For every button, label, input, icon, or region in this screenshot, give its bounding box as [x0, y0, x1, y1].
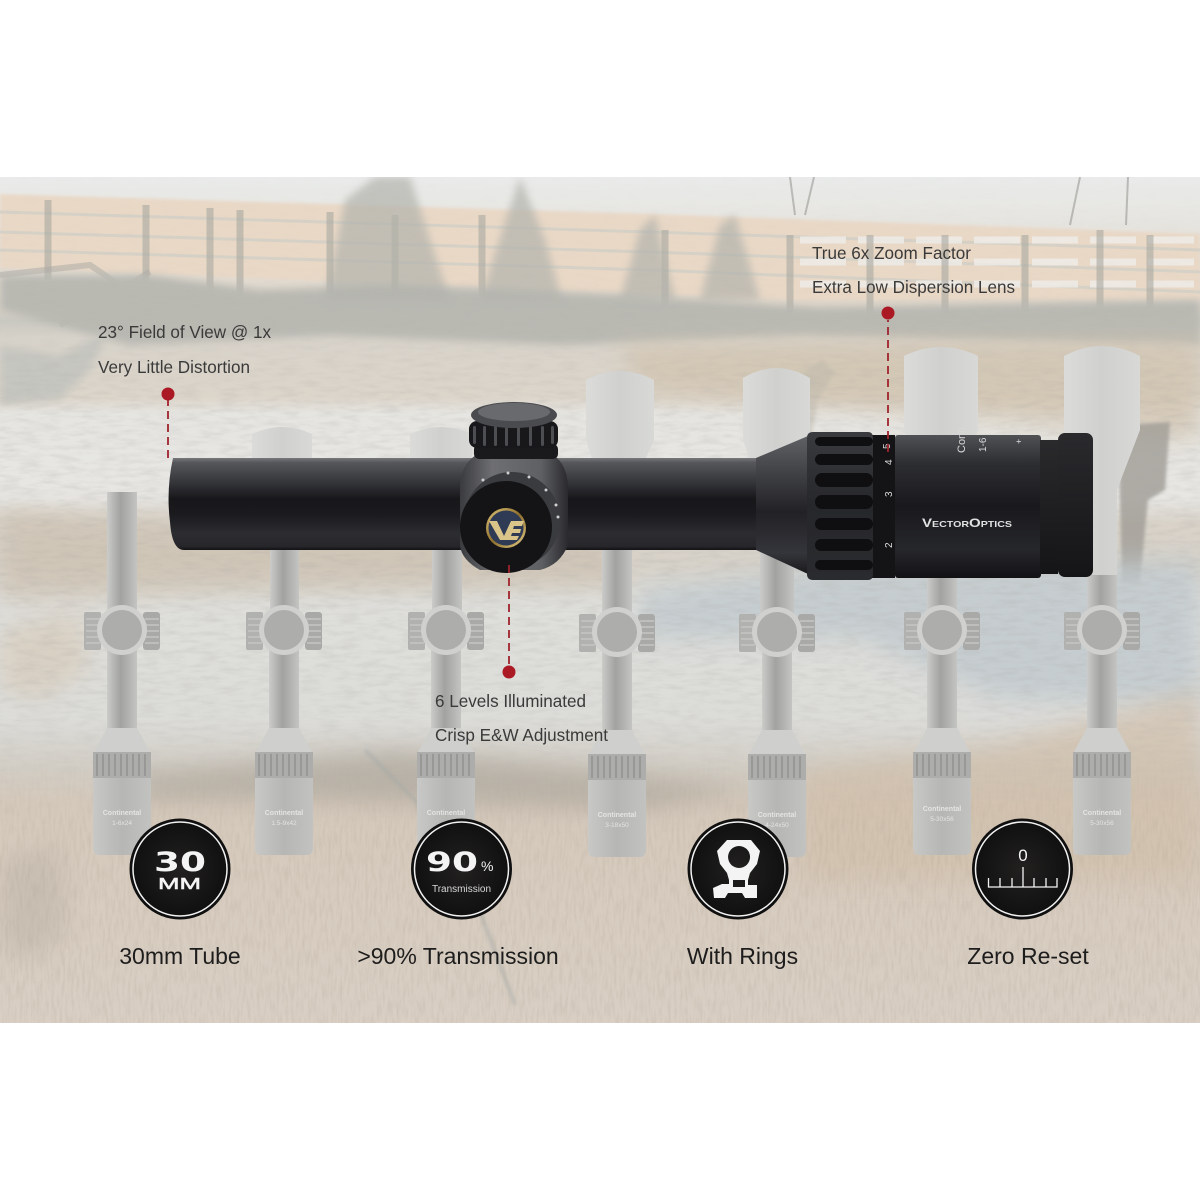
dry grass on right	[620, 340, 1200, 440]
icon: 30 mm badge: MM	[158, 876, 201, 893]
main rifle scope	[169, 402, 1093, 580]
lower dark shrubs	[130, 750, 760, 810]
feature: with rings: With Rings	[687, 943, 798, 969]
icon: 90 percent badge: 90	[426, 847, 478, 878]
model text on eyepiece	[956, 427, 1024, 453]
top turret	[469, 402, 558, 459]
model text on eyepiece: 1-6	[978, 437, 989, 452]
dark bush left	[2, 854, 66, 954]
eyepiece body	[895, 435, 1041, 578]
pin and leader	[502, 565, 516, 678]
ghost scope 6: 5-30x56	[930, 816, 954, 823]
feature: transmission	[357, 818, 559, 969]
magnification numbers: 5	[882, 443, 893, 449]
left grass patch	[0, 610, 90, 700]
callout: illumination: 6 Levels Illuminated	[435, 691, 586, 711]
ghost scope 6	[904, 347, 980, 855]
magnification numbers: 3	[884, 491, 895, 497]
ghost scope 1: Continental	[103, 810, 141, 817]
ghost scope 2	[246, 427, 322, 855]
ghost scope 2: 1.5-9x42	[271, 820, 297, 827]
ghost scope 7: Continental	[1083, 810, 1121, 817]
icon: scope ring	[688, 818, 788, 920]
callout: field of view	[98, 322, 271, 458]
magnification numbers: 2	[884, 542, 895, 548]
icon: zero scale	[972, 818, 1073, 920]
eyepiece flare	[756, 436, 808, 574]
ghost scope 5: Continental	[758, 812, 796, 819]
icon: 90 percent badge: Transmission	[432, 884, 491, 895]
ghost scope 5: 4-24x50	[765, 822, 789, 829]
callout: illumination	[435, 565, 608, 745]
callout: zoom factor: True 6x Zoom Factor	[812, 243, 971, 263]
icon: 90 percent badge: %	[481, 858, 493, 874]
water stream	[640, 560, 1200, 705]
feature: 30mm tube	[119, 818, 241, 969]
ghost scope 4: 3-18x50	[605, 822, 629, 829]
pin and leader	[162, 388, 174, 458]
callout: field of view: Very Little Distortion	[98, 357, 250, 377]
pin and leader	[882, 306, 894, 452]
stream channel	[365, 750, 515, 1005]
feature: 30mm tube: 30mm Tube	[119, 943, 241, 969]
icon: zero scale: 0	[1018, 846, 1028, 865]
fence	[0, 194, 1200, 325]
ghost scope 3: Continental	[427, 810, 465, 817]
right brown bank	[800, 690, 1200, 880]
callout: illumination: Crisp E&W Adjustment	[435, 725, 608, 745]
deer silhouette	[804, 363, 832, 432]
ghost scope 5	[739, 368, 815, 857]
feature: zero re-set: Zero Re-set	[967, 943, 1089, 969]
ghost scope 7: 5-30x56	[1090, 820, 1114, 827]
sky dead trunks	[790, 177, 1128, 225]
eye cup	[1058, 433, 1093, 577]
ghost scope 1	[84, 492, 160, 855]
icon: 30 mm badge: 30	[154, 847, 206, 878]
model text on eyepiece: Conti	[956, 427, 968, 453]
callout: zoom factor: Extra Low Dispersion Lens	[812, 277, 1015, 297]
main tube	[169, 458, 758, 550]
callout: zoom factor	[812, 243, 1015, 452]
feature: with rings	[687, 818, 798, 969]
ghost scope 3	[408, 427, 484, 855]
turret saddle	[460, 452, 568, 570]
brand badge	[486, 508, 526, 548]
brand text: VECTOR O PTICS	[922, 516, 1012, 530]
icon: 30 mm badge	[130, 818, 230, 920]
feature: zero re-set	[967, 818, 1089, 969]
ground texture	[0, 380, 1200, 1023]
ghost scope 2: Continental	[265, 810, 303, 817]
mid grass band on left	[0, 510, 630, 600]
dark treeline	[0, 177, 1200, 405]
magnification ring	[807, 432, 895, 580]
icon: 90 percent badge	[411, 818, 512, 920]
feature: transmission: >90% Transmission	[357, 943, 559, 969]
callout: field of view: 23° Field of View @ 1x	[98, 322, 271, 342]
ghost scope 6: Continental	[923, 806, 961, 813]
magnification numbers	[882, 443, 895, 548]
ghost scope 4: Continental	[598, 812, 636, 819]
side knob	[460, 472, 560, 573]
distant animal	[1118, 422, 1170, 582]
magnification numbers: 4	[884, 459, 895, 465]
background photo panel	[0, 177, 1200, 1023]
ghost scope 1: 1-6x24	[112, 820, 132, 827]
ghost scope 4	[579, 371, 655, 857]
ghost scope 7	[1064, 346, 1140, 855]
model text on eyepiece: +	[1014, 439, 1024, 444]
